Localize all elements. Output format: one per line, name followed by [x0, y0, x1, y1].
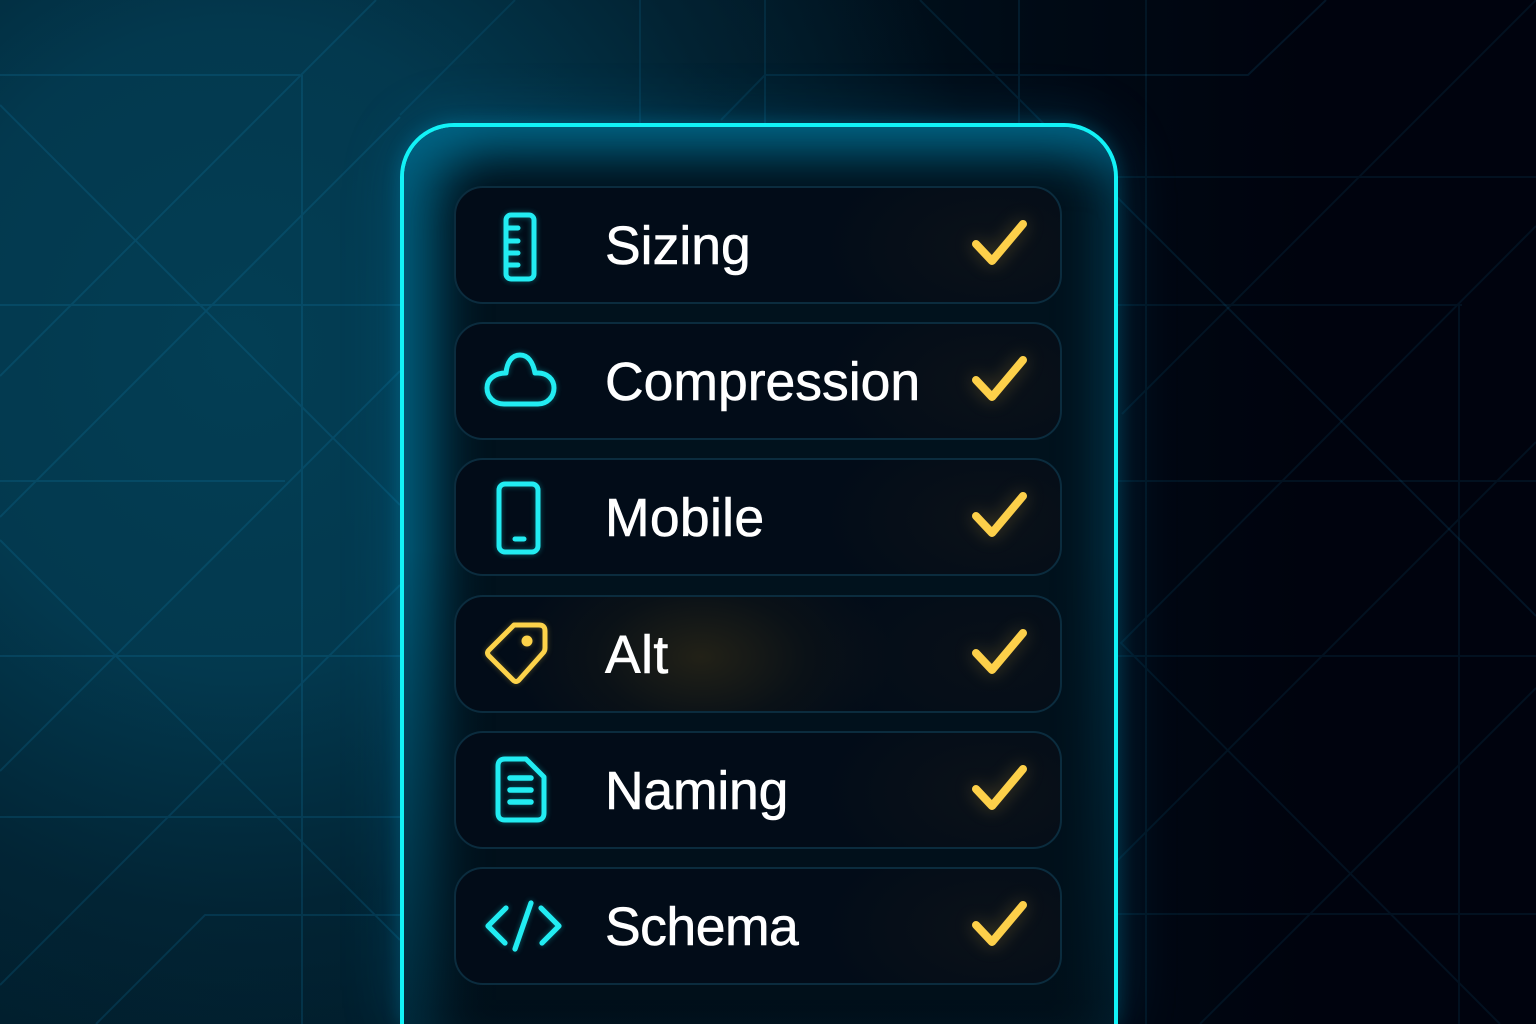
label: Schema: Schema: [605, 898, 798, 957]
label: Sizing: Sizing: [605, 217, 751, 276]
label: Alt: Alt: [605, 626, 669, 685]
row: Alt (highlighted): [454, 595, 1062, 713]
icon: check: [969, 626, 1030, 679]
icon: ruler: [500, 209, 540, 285]
icon: code brackets: [483, 898, 564, 954]
icon: document: [492, 753, 550, 826]
label: Naming: Naming: [605, 762, 788, 821]
icon: check: [969, 490, 1030, 542]
icon: smartphone: [493, 478, 544, 558]
icon: tag: [482, 619, 551, 686]
icon: cloud: [482, 350, 560, 410]
icon: check: [969, 898, 1030, 951]
icon: check: [969, 762, 1030, 815]
row: Naming: [454, 731, 1062, 849]
row: Compression: [454, 322, 1062, 440]
row: Schema: [454, 867, 1062, 985]
row: Sizing: [454, 186, 1062, 304]
row: Mobile: [454, 458, 1062, 576]
label: Compression: Compression: [605, 353, 920, 412]
icon: check: [969, 218, 1030, 270]
label: Mobile: Mobile: [605, 489, 764, 548]
icon: check: [969, 354, 1030, 406]
panel: checklist card: [400, 123, 1118, 1024]
